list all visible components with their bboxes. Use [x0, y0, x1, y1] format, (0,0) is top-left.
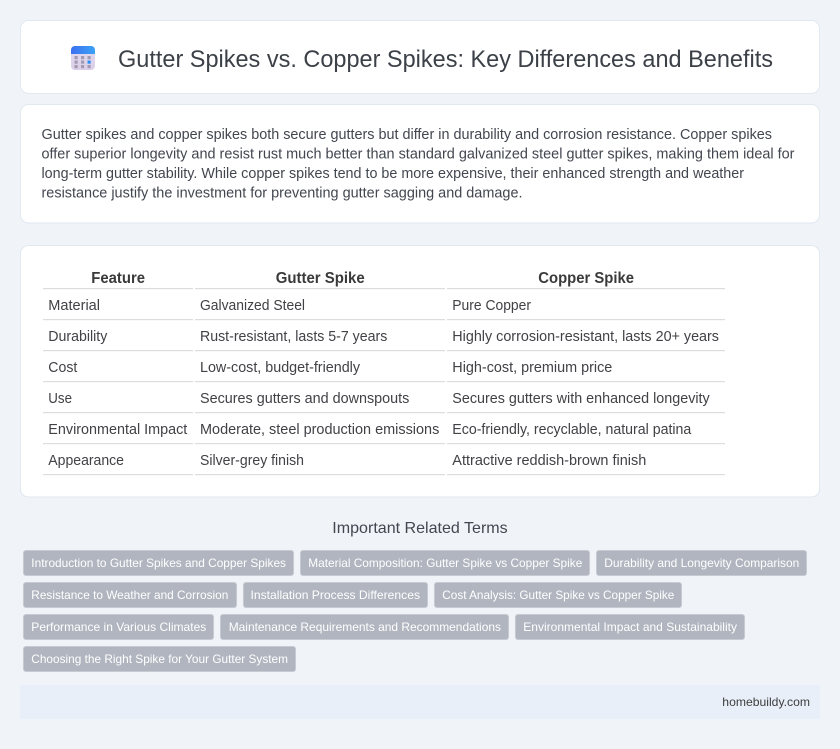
row: environmental impact: Moderate, steel production emissions [200, 422, 439, 438]
row: cost: Cost [48, 360, 77, 376]
tag [596, 550, 806, 576]
row: durability: Rust-resistant, lasts 5-7 years [200, 329, 387, 345]
tag [434, 582, 682, 608]
row: material: Material [48, 298, 100, 314]
table header row: Copper Spike [538, 270, 634, 287]
row: material: Pure Copper [452, 298, 531, 314]
row: appearance [48, 453, 646, 469]
tag [300, 550, 590, 576]
footer source text: homebuildy.com [722, 695, 810, 709]
tag: Choosing the Right Spike for Your Gutter System [31, 652, 288, 666]
description text: long-term gutter stability. While copper spikes tend to be more expensive, their enhanced strength and weather [42, 166, 744, 182]
row: use [48, 391, 710, 407]
tag: Maintenance Requirements and Recommendations [229, 620, 501, 634]
icon: calendar [71, 46, 95, 70]
row: material: Galvanized Steel [200, 298, 305, 314]
row: environmental impact: Environmental Impact [48, 422, 187, 438]
tag [24, 646, 296, 672]
row: appearance: Appearance [48, 453, 124, 469]
row: appearance: Attractive reddish-brown finish [452, 453, 646, 469]
row: durability [48, 329, 719, 345]
title: Gutter Spikes vs. Copper Spikes: Key Differences and Benefits [118, 46, 773, 73]
table header row: Gutter Spike [276, 270, 365, 287]
description text [42, 127, 795, 202]
row: appearance: Silver-grey finish [200, 453, 304, 469]
panel: description [20, 104, 820, 223]
tag [24, 550, 294, 576]
tag: Introduction to Gutter Spikes and Copper Spikes [31, 556, 286, 570]
description text: resistance justify the investment for preventing gutter sagging and damage. [42, 186, 522, 202]
table header row: Feature [91, 270, 145, 287]
panel: comparison table [20, 246, 820, 497]
footer bar [20, 685, 820, 719]
tag: Environmental Impact and Sustainability [523, 620, 737, 634]
tag: Resistance to Weather and Corrosion [31, 588, 228, 602]
row: durability: Durability [48, 329, 108, 345]
row: environmental impact [48, 422, 691, 438]
panel: related term tags [24, 550, 806, 672]
tag: Material Composition: Gutter Spike vs Copper Spike [308, 556, 583, 570]
tag: Cost Analysis: Gutter Spike vs Copper Spike [442, 588, 675, 602]
tag [220, 614, 508, 640]
tag: Durability and Longevity Comparison [604, 556, 799, 570]
row: environmental impact: Eco-friendly, recyclable, natural patina [452, 422, 691, 438]
row: use: Secures gutters and downspouts [200, 391, 409, 407]
tag: Performance in Various Climates [31, 620, 206, 634]
row: cost [48, 360, 612, 376]
row: cost: Low-cost, budget-friendly [200, 360, 361, 376]
row: cost: High-cost, premium price [452, 360, 612, 376]
table header row [91, 270, 634, 287]
tag [516, 614, 744, 640]
tag [24, 614, 214, 640]
panel: header [20, 20, 820, 94]
row: use: Secures gutters with enhanced longevity [452, 391, 710, 407]
description text: offer superior longevity and resist rust much better than standard galvanized steel gutter spikes, making them ideal for [42, 146, 795, 162]
tag [24, 582, 236, 608]
tag: Installation Process Differences [250, 588, 420, 602]
row: material [48, 298, 531, 314]
heading: important related terms: Important Related Terms [332, 520, 508, 537]
tag [244, 582, 428, 608]
row: use: Use [48, 391, 72, 407]
description text: Gutter spikes and copper spikes both secure gutters but differ in durability and corrosion resistance. Copper spikes [42, 127, 772, 143]
row: durability: Highly corrosion-resistant, lasts 20+ years [452, 329, 719, 345]
